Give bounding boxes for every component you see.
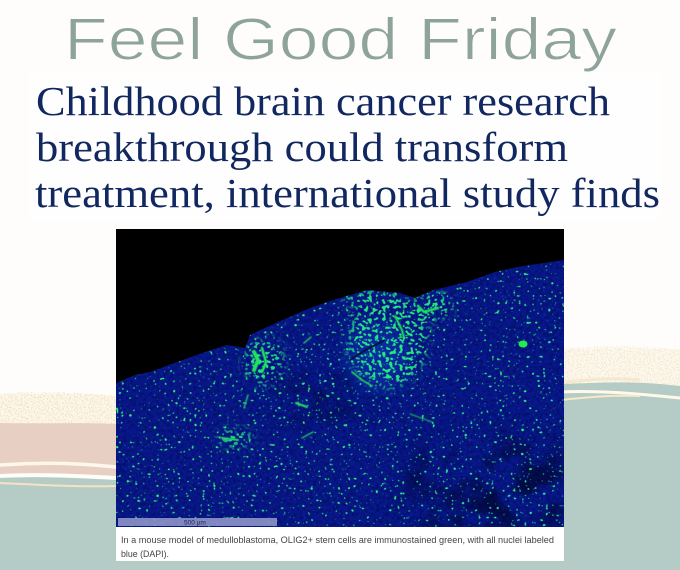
headline xyxy=(35,78,660,216)
decorative watercolor band: right xyxy=(560,345,680,570)
bottom teal band behind image xyxy=(110,490,570,570)
scale bar: 500 µm xyxy=(184,520,206,526)
caption: In a mouse model of medulloblastoma, OLIG2+ stem cells are immunostained green, with all nuclei labeled xyxy=(121,535,554,545)
caption: blue (DAPI). xyxy=(121,549,169,559)
caption xyxy=(121,535,554,559)
scale bar xyxy=(118,518,277,526)
microscopy image card xyxy=(116,229,564,561)
title: Feel Good Friday xyxy=(64,6,618,72)
headline: Childhood brain cancer research xyxy=(36,78,610,124)
headline panel xyxy=(30,72,662,222)
headline: breakthrough could transform xyxy=(36,124,568,170)
microscopy image xyxy=(116,229,564,527)
decorative watercolor band: left xyxy=(0,390,120,570)
headline: treatment, international study finds xyxy=(35,170,660,216)
caption background xyxy=(116,527,564,561)
